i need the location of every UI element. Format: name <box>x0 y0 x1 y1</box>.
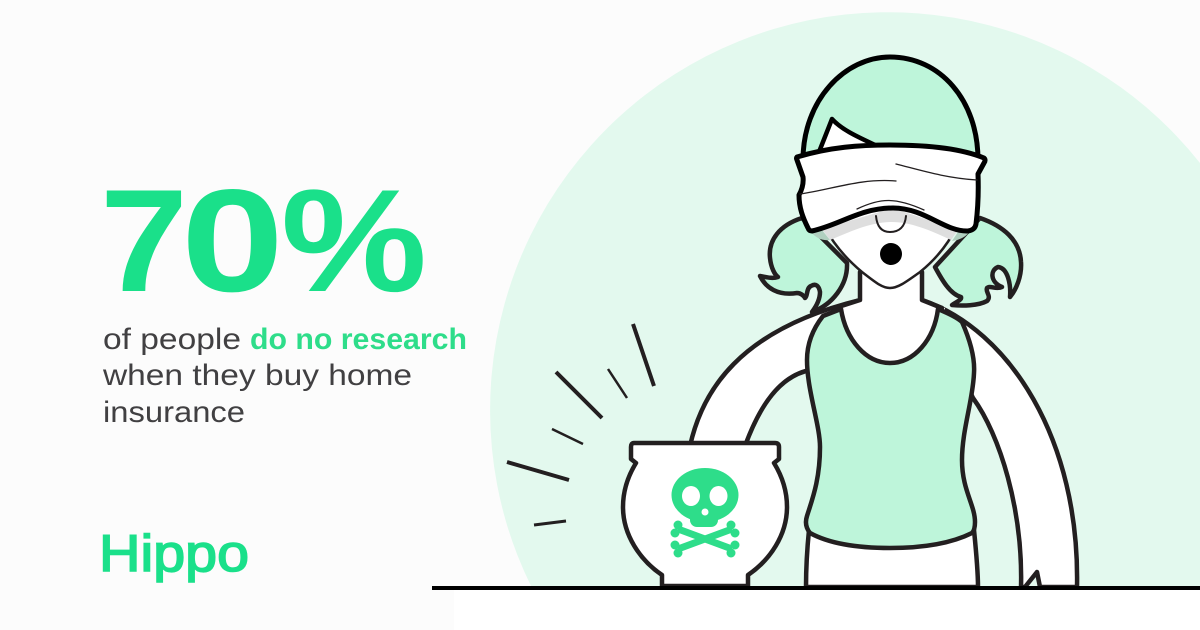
neck <box>835 262 945 375</box>
blindfold shadow <box>822 208 958 240</box>
description text: do no research <box>250 323 467 356</box>
statistic: 70% <box>100 159 427 322</box>
blindfold <box>796 145 985 231</box>
illustration: blindfolded woman <box>690 57 1077 587</box>
background circle <box>490 12 1200 588</box>
table line <box>432 586 1200 590</box>
statistic: 70%: % <box>281 159 427 322</box>
nose <box>876 216 906 232</box>
description text: insurance <box>103 396 245 429</box>
description text: of people <box>103 323 241 356</box>
hair <box>803 57 978 160</box>
fringe <box>819 119 875 152</box>
pigtail shadows <box>811 229 971 241</box>
face <box>815 190 965 288</box>
right arm <box>922 300 1077 587</box>
statistic: 70%: 7 <box>100 159 188 322</box>
left pigtail <box>760 218 847 312</box>
icon: burst lines around pot <box>507 324 654 525</box>
pot with poison <box>623 443 787 586</box>
left arm <box>690 300 860 446</box>
description text: when they buy home <box>102 359 412 392</box>
tank top <box>806 309 975 548</box>
logo: Hippo: Hippo <box>99 525 249 583</box>
pants <box>806 530 978 587</box>
statistic: 70%: 0 <box>181 159 284 322</box>
right pigtail <box>935 218 1021 306</box>
pot body <box>623 443 787 586</box>
description text <box>102 323 467 429</box>
icon: skull and crossbones <box>670 468 740 558</box>
mouth <box>880 243 902 265</box>
